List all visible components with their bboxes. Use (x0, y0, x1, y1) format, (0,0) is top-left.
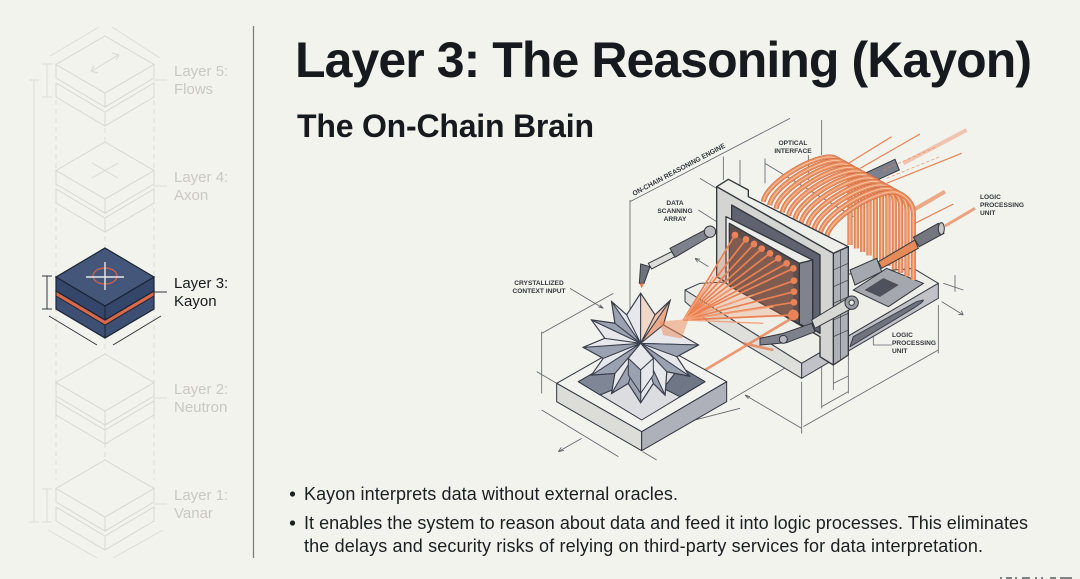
layer 4: axon: Layer 4: (174, 169, 228, 186)
layer 4: axon (56, 142, 228, 232)
lower laser stream (698, 318, 792, 374)
machine base (685, 268, 938, 378)
label: optical interface: INTERFACE (774, 148, 812, 155)
label: logic processing unit upper: PROCESSING (980, 202, 1024, 209)
label: logic processing unit upper: LOGIC (980, 194, 1001, 201)
layer 1: vanar (56, 460, 228, 550)
scanner frame (717, 179, 848, 365)
bullet 2 (290, 513, 1028, 556)
label: data scanning array: SCANNING (657, 208, 693, 215)
machine drawing (630, 118, 975, 433)
bullet list (290, 484, 1028, 556)
layer 5: flows: Layer 5: (174, 63, 228, 80)
label: crystallized context input: CRYSTALLIZED (514, 280, 564, 287)
output rays (848, 130, 975, 226)
label: logic processing unit upper: UNIT (980, 210, 995, 217)
crystal on base (537, 288, 740, 460)
layer 3: kayon, active: Layer 3: (174, 275, 228, 292)
scanning arm (639, 226, 716, 288)
layer 5: flows: Flows (174, 81, 213, 98)
layer 2: neutron: Layer 2: (174, 381, 228, 398)
illustration: on-chain reasoning engine machine (512, 118, 1024, 460)
label: logic processing unit lower: LOGIC (892, 332, 913, 339)
title: Layer 3: The Reasoning (Kayon) (295, 32, 1032, 88)
label: optical interface: OPTICAL (779, 140, 807, 147)
rear cylinder (865, 159, 899, 183)
sensor rods (732, 232, 799, 320)
layer 5: flows (56, 36, 228, 126)
label: crystallized context input: CONTEXT INPUT (512, 288, 566, 295)
bullet 2: It enables the system to reason about data and feed it into logic processes. This eliminates (304, 513, 1028, 533)
layer 2: neutron (56, 354, 228, 444)
subtitle: The On-Chain Brain (297, 108, 594, 144)
label: data scanning array: ARRAY (664, 216, 687, 223)
label: data scanning array: DATA (666, 200, 684, 207)
layer 4: axon: Axon (174, 187, 208, 204)
layer 2: neutron: Neutron (174, 399, 227, 416)
label: logic processing unit lower: PROCESSING (892, 340, 936, 347)
label: logic processing unit lower: UNIT (892, 348, 907, 355)
crystal (583, 293, 698, 403)
bullet 1: Kayon interprets data without external oracles. (304, 484, 678, 504)
logic arm (760, 296, 858, 345)
layer 1: vanar: Layer 1: (174, 487, 228, 504)
optical coil tubes (763, 157, 913, 280)
bullet 2: the delays and security risks of relying on third-party services for data interpretation. (304, 536, 983, 556)
layer 1: vanar: Vanar (174, 505, 213, 522)
layer 3: kayon, active (42, 248, 228, 345)
crystal plinth (557, 335, 727, 451)
layer 3: kayon, active: Kayon (174, 293, 217, 310)
processing chip (853, 268, 923, 307)
front output cylinder (850, 223, 944, 285)
scanning beam fan (683, 235, 794, 323)
label: engine: ON-CHAIN REASONING ENGINE (632, 143, 727, 198)
sidebar: layer stack navigator (29, 27, 228, 558)
